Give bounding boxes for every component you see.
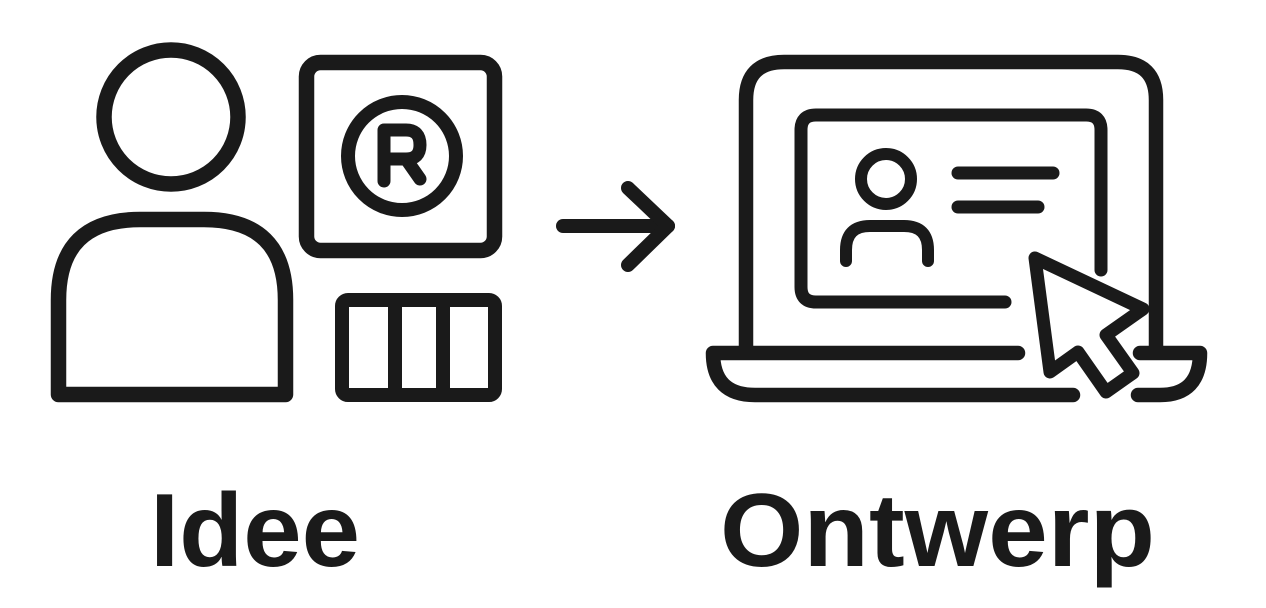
arrow — [563, 188, 668, 265]
icon: person with trademark — [58, 50, 495, 395]
icon: laptop with profile and cursor — [713, 62, 1200, 395]
icon: mouse cursor — [1035, 258, 1143, 392]
icon: laptop screen frame — [746, 62, 1156, 350]
icon: bar grid box — [342, 300, 495, 395]
label: Ontwerp: Ontwerp — [720, 473, 1155, 589]
icon: registered trademark box — [306, 62, 494, 250]
icon: inner window — [801, 115, 1101, 302]
icon: text lines — [958, 173, 1053, 207]
label: Idee: Idee — [150, 473, 360, 589]
icon: person body — [58, 220, 286, 394]
icon: profile avatar — [846, 154, 928, 261]
icon: laptop base — [713, 353, 1200, 395]
icon: person head — [104, 50, 238, 184]
